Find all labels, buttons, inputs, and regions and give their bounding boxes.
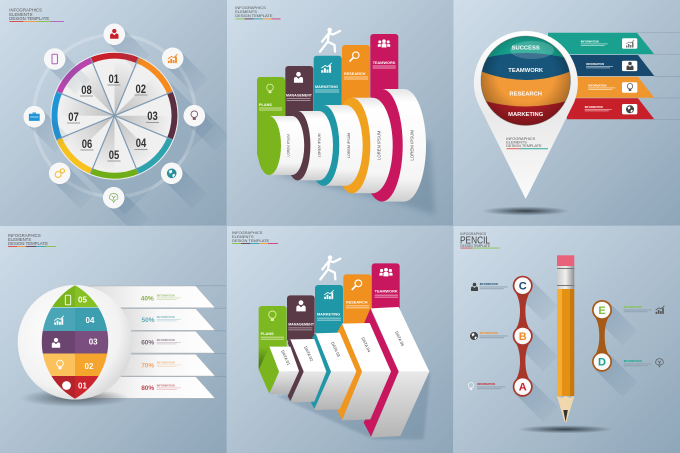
heading: INFOGRAPHICS	[9, 8, 42, 12]
card: management	[285, 66, 313, 126]
chart: segmented wheel: 08	[81, 85, 92, 97]
chain: A B C: B	[519, 331, 527, 343]
heading: DESIGN TEMPLATE	[232, 238, 270, 243]
heading: DESIGN TEMPLATE	[9, 16, 49, 21]
label B: INFORMATION	[480, 331, 498, 335]
ribbons with percentages	[90, 286, 215, 398]
label A	[468, 382, 505, 390]
chevron shadow	[277, 373, 430, 439]
card: management: MANAGEMENT	[288, 322, 315, 326]
card: teamwork: TEAMWORK	[375, 290, 398, 294]
panel: pie wheel	[0, 0, 230, 233]
heading: INFOGRAPHICS	[460, 232, 487, 236]
ribbons with percentages: INFORMATION	[157, 294, 175, 298]
sphere labels: TEAMWORK	[508, 68, 544, 74]
ribbon: teal: INFORMATION	[581, 40, 599, 44]
card: plans	[259, 306, 287, 369]
panel: chevrons	[227, 226, 453, 453]
chain: D E: D	[598, 357, 606, 369]
ribbon: blue: INFORMATION	[586, 62, 604, 66]
chart: segmented wheel: 04	[136, 138, 147, 150]
label E	[624, 305, 664, 314]
heading: INFOGRAPHICS	[235, 5, 266, 10]
ribbons with percentages: 50%	[141, 317, 155, 324]
heading: ELEMENTS	[232, 234, 254, 239]
heading	[9, 8, 64, 22]
pin text	[506, 137, 548, 149]
card: plans: PLANS	[261, 332, 274, 336]
card: marketing: MARKETING	[315, 85, 338, 89]
ribbons with percentages: 80%	[141, 385, 154, 392]
heading: ELEMENTS	[8, 237, 31, 242]
chevron 04: DATA 04	[360, 336, 372, 354]
card: plans	[257, 77, 285, 157]
sphere labels: MARKETING	[508, 112, 544, 118]
cylinder 1: LOREM IPSUM	[287, 134, 291, 156]
chart: segmented wheel: 03	[147, 111, 158, 123]
sphere	[18, 285, 132, 400]
heading: ELEMENTS	[235, 9, 257, 14]
leaf numbers: 04	[86, 316, 95, 325]
sphere bands	[481, 36, 570, 126]
ribbons with percentages: 70%	[141, 362, 154, 370]
cylinder shadow	[275, 140, 435, 215]
ribbons with percentages: 60%	[141, 340, 154, 346]
chevron 03: DATA 03	[330, 341, 342, 358]
chevron 05	[364, 307, 429, 438]
card: teamwork	[372, 263, 400, 310]
heading	[8, 233, 56, 247]
icon circles around the wheel	[24, 24, 230, 233]
chain: D E	[592, 300, 612, 372]
pin text: INFOGRAPHICS	[506, 137, 536, 141]
card: management	[287, 295, 315, 342]
card: research	[343, 274, 371, 326]
card: teamwork: TEAMWORK	[373, 61, 396, 65]
heading	[235, 5, 280, 19]
chevron 05: DATA 05	[394, 330, 406, 348]
card: marketing	[315, 285, 343, 335]
cylinder 4: LOREM IPSUM	[377, 130, 382, 160]
ribbons with percentages: INFORMATION	[157, 384, 175, 388]
card: teamwork	[370, 34, 398, 99]
leaf bands	[40, 285, 110, 399]
card: plans: PLANS	[259, 103, 272, 107]
pin text: ELEMENTS	[506, 141, 527, 145]
chevron 01	[259, 347, 299, 394]
pin body	[474, 31, 578, 199]
icon: runner	[320, 28, 340, 52]
ribbons with percentages: 40%	[141, 296, 154, 302]
chain: A B C	[513, 276, 533, 397]
leaf numbers: 01	[78, 381, 87, 390]
heading	[232, 230, 278, 244]
ribbon: orange: INFORMATION	[588, 84, 607, 88]
sphere labels	[508, 46, 544, 118]
sphere labels: RESEARCH	[509, 91, 542, 97]
label E: INFORMATION	[624, 305, 642, 309]
leaf numbers: 03	[89, 338, 98, 347]
chart: segmented wheel: 05	[109, 150, 120, 162]
chevron 01: DATA 01	[280, 349, 292, 367]
sphere labels: SUCCESS	[512, 46, 540, 52]
heading: DESIGN TEMPLATE	[460, 244, 490, 248]
cylinder 5	[361, 89, 426, 202]
pencil shadow	[517, 425, 613, 433]
cylinder 5: LOREM IPSUM	[410, 130, 415, 161]
heading: ELEMENTS	[9, 12, 33, 17]
card: research	[342, 45, 370, 110]
sphere rim	[481, 36, 570, 125]
chevron 04	[337, 323, 391, 420]
ribbon: blue	[560, 55, 654, 76]
card: research: RESEARCH	[346, 300, 368, 304]
chart: segmented wheel	[50, 52, 178, 180]
pencil	[557, 255, 574, 422]
pin ground shadow	[482, 206, 570, 216]
chevron 03	[311, 333, 356, 410]
chevron 02	[288, 339, 326, 403]
cylinder 1	[257, 116, 304, 175]
ribbons with percentages: INFORMATION	[157, 315, 175, 319]
cylinder 2: LOREM IPSUM	[318, 133, 322, 157]
ribbons with percentages: INFORMATION	[157, 338, 175, 342]
label A: INFORMATION	[477, 382, 495, 386]
label B	[470, 331, 508, 340]
heading: DESIGN TEMPLATE	[235, 13, 273, 18]
label C: INFORMATION	[480, 282, 498, 286]
cylinder 2	[285, 111, 333, 180]
chart: segmented wheel: 01	[108, 74, 119, 86]
card: marketing	[314, 56, 342, 116]
cylinder 3: LOREM IPSUM	[347, 133, 351, 158]
ring	[34, 35, 196, 197]
chevron drawing	[259, 255, 430, 439]
cylinder 4	[334, 98, 393, 193]
leaf icons	[52, 295, 71, 390]
chain: A B C: C	[519, 281, 527, 293]
card: marketing: MARKETING	[317, 313, 340, 317]
panel: cylinders	[227, 0, 453, 226]
pin text: DESIGN TEMPLATE	[506, 144, 542, 148]
ribbon: red: INFORMATION	[585, 105, 603, 109]
sphere ground shadow	[20, 389, 130, 407]
leaf numbers: 02	[84, 362, 94, 371]
ribbon: teal	[548, 33, 654, 54]
chain: D E: E	[598, 305, 606, 317]
label D: INFORMATION	[624, 359, 642, 363]
card: management: MANAGEMENT	[286, 94, 313, 98]
cylinder 3	[308, 105, 363, 186]
node shadows	[515, 278, 637, 422]
label D	[624, 359, 663, 367]
heading: DESIGN TEMPLATE	[8, 241, 48, 246]
chart: segmented wheel: 06	[82, 139, 92, 151]
ribbons with percentages: INFORMATION	[157, 360, 175, 364]
chevron 02: DATA 02	[303, 345, 315, 363]
heading	[460, 232, 500, 248]
ribbon: orange	[565, 77, 654, 98]
panel: pencil	[454, 226, 680, 453]
label C	[471, 282, 508, 291]
disc shadow	[70, 71, 214, 215]
chart: segmented wheel: 07	[68, 112, 79, 124]
chart: segmented wheel: 02	[135, 84, 146, 96]
panel: leaf sphere	[0, 226, 226, 453]
chain: A B C: A	[519, 382, 527, 394]
card: research: RESEARCH	[344, 72, 366, 76]
panel: location pin	[454, 0, 680, 226]
ribbon: red	[565, 98, 654, 119]
icon: runner	[320, 255, 340, 279]
leaf numbers	[78, 296, 98, 390]
heading: PENCIL	[460, 234, 490, 246]
leaf numbers: 05	[78, 296, 87, 305]
heading: INFOGRAPHICS	[232, 230, 263, 235]
heading: INFOGRAPHICS	[8, 233, 41, 238]
